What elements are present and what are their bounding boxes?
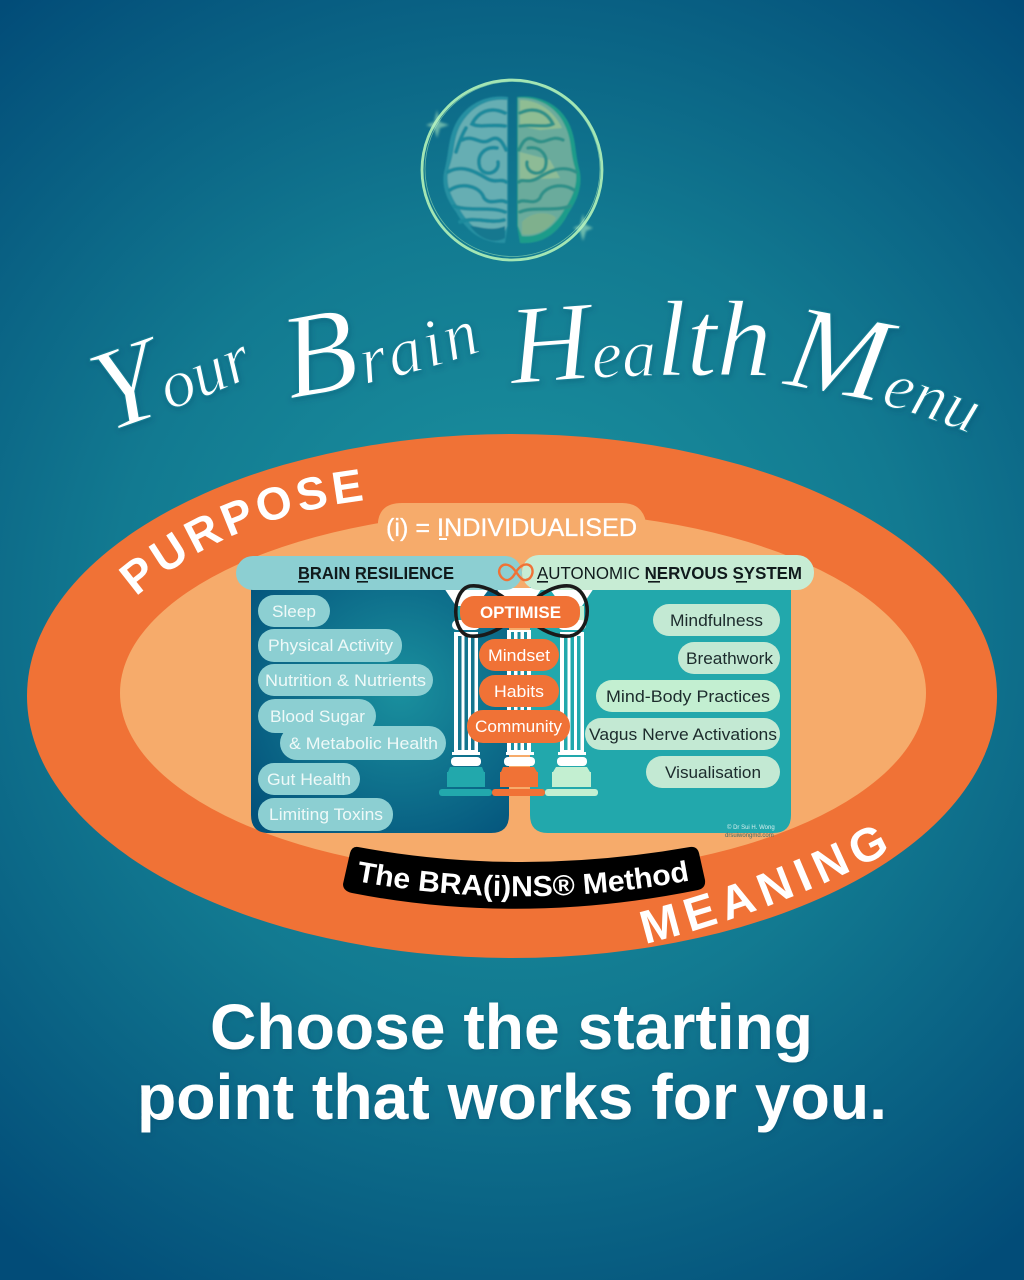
brain resilience items [258,595,446,831]
copyright note: © Dr Sui H. Wong [727,824,775,831]
right hemisphere [517,97,581,243]
outer orange ellipse: purpose and meaning [27,434,997,958]
Community pill [467,710,570,743]
Mind-body pill [596,680,780,712]
Blood sugar pill [258,699,376,733]
title [89,300,980,433]
header: autonomic nervous system [522,555,814,590]
Sleep pill: Sleep [272,603,316,621]
Optimise pill [460,596,580,628]
Limiting toxins pill: Limiting Toxins [269,806,383,824]
Vagus nerve pill: Vagus Nerve Activations [589,726,777,744]
title word: Menu: Menu [782,308,980,433]
Gut health pill [258,763,360,795]
title word: Health: Health [511,300,768,386]
header: brain resilience [236,556,522,590]
Mindset pill: Mindset [488,647,550,665]
method banner: The BRA(i)NS® Method [359,860,688,902]
bottom message: point that works for you. [137,1061,887,1133]
Habits pill [479,675,559,707]
copyright note [725,824,775,839]
Gut health pill: Gut Health [267,771,351,789]
Mindfulness pill [653,604,780,636]
sparkles [426,110,593,241]
header: autonomic nervous system: AUTONOMIC NERVOUS SYSTEM [537,563,802,583]
panel: autonomic nervous system [530,585,791,833]
bottom message: Choose the starting [210,991,813,1063]
Metabolic health pill: & Metabolic Health [289,735,438,753]
Vagus nerve pill [585,718,780,750]
Optimise pill: OPTIMISE [480,604,561,622]
Breathwork pill: Breathwork [686,650,774,668]
inner light ellipse [120,511,926,875]
Mindfulness pill: Mindfulness [670,612,763,630]
left hemisphere [443,97,508,243]
logo ring [422,80,602,260]
icon: large black infinity loop [456,586,587,636]
individualised tab: (i) = INDIVIDUALISED [386,514,637,542]
centre optimise stack [460,596,580,743]
nervous system items [585,604,780,788]
left pillar [439,588,492,796]
Mindset pill [479,639,559,671]
Breathwork pill [678,642,780,674]
Nutrition pill: Nutrition & Nutrients [265,672,426,690]
Limiting toxins pill [258,798,393,831]
individualised tab [378,503,646,560]
MEANING curved label: MEANING [640,828,886,944]
Visualisation pill: Visualisation [665,764,761,782]
Habits pill: Habits [494,683,544,701]
title word: Your: Your [89,336,246,429]
Metabolic health pill [280,726,446,760]
Sleep pill [258,595,330,627]
Nutrition pill [258,664,433,696]
title word: Brain: Brain [288,312,479,401]
Community pill: Community [475,718,563,736]
Mind-body pill: Mind-Body Practices [606,688,770,706]
icon: small orange infinity [499,564,533,580]
panel: brain resilience [251,585,509,833]
Visualisation pill [646,756,780,788]
bottom message [137,991,887,1133]
right pillar [545,588,598,796]
header: brain resilience: BRAIN RESILIENCE [298,563,454,583]
PURPOSE curved label: PURPOSE [118,469,363,595]
Blood sugar pill: Blood Sugar [270,708,366,726]
Physical Activity pill [258,629,402,662]
copyright note: drsuiwongmd.com [725,833,774,839]
centre pillar [492,588,545,796]
Physical Activity pill: Physical Activity [268,637,394,655]
brain logo [422,80,602,260]
